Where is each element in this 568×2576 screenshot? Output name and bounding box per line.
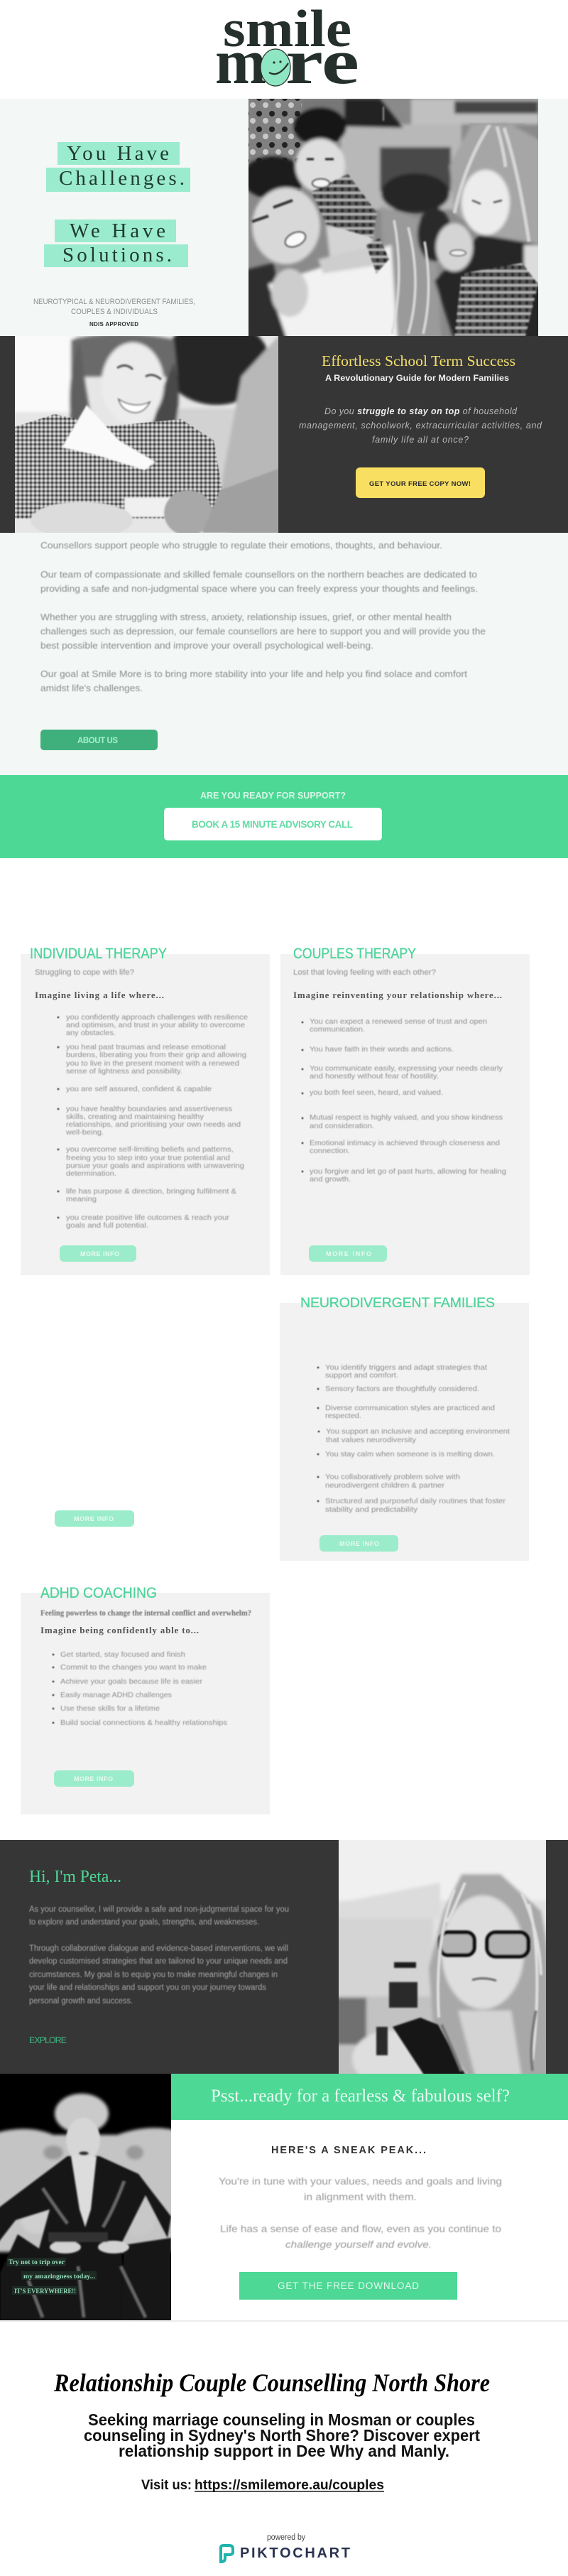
heading: NEURODIVERGENT FAMILIES	[300, 1295, 495, 1311]
bullet list: you have healthy boundaries and assertiveness	[66, 1105, 232, 1113]
bullet list: Achieve your goals because life is easier	[60, 1677, 203, 1686]
bullet list: Get started, stay focused and finish	[60, 1650, 185, 1659]
button: more info: MORE INFO	[74, 1775, 113, 1782]
description: Seeking marriage counseling in Mosman or couples	[88, 2410, 475, 2429]
button: more info, left of neurodivergent panel	[55, 1510, 134, 1527]
band question: ARE YOU READY FOR SUPPORT?	[200, 791, 346, 801]
hero headline: Challenges.	[59, 167, 185, 190]
bullet list: burdens, liberating you from their grip and allowing	[66, 1051, 246, 1059]
icon: piktochart mark	[221, 2545, 233, 2562]
bullet list: determination.	[66, 1169, 116, 1178]
bullet list: skills, creating and maintaining healthy	[66, 1113, 204, 1121]
bullet list	[58, 1013, 248, 1230]
photo caption: my amazingness today...	[23, 2273, 95, 2280]
about text: Our goal at Smile More is to bring more stability into your life and help you find solace and comfort	[40, 669, 468, 679]
button: more info	[309, 1245, 387, 1262]
photo: smiling schoolgirl	[15, 336, 278, 533]
bullet list	[302, 1017, 506, 1184]
bullet list	[317, 1363, 510, 1514]
photo: Peta portrait	[339, 1840, 546, 2074]
bullet list: Commit to the changes you want to make	[60, 1663, 207, 1672]
bullet list: You collaboratively problem solve with	[325, 1473, 460, 1481]
bullet list: respected.	[325, 1412, 361, 1420]
panel: about Peta	[0, 1836, 568, 2087]
button: more info: MORE INFO	[326, 1250, 371, 1257]
description: relationship support in Dee Why and Manly.	[119, 2442, 449, 2460]
heading: INDIVIDUAL THERAPY	[30, 946, 167, 962]
photo: laughing family	[242, 99, 543, 341]
guide question	[299, 406, 542, 445]
button: advisory call	[164, 808, 382, 840]
hero subtitle: COUPLES & INDIVIDUALS	[71, 308, 158, 316]
bullet list: Structured and purposeful daily routines that foster	[325, 1497, 506, 1505]
bio text: Through collaborative dialogue and evidence-based interventions, we will	[29, 1944, 288, 1953]
bullet list: that values neurodiversity	[326, 1436, 417, 1444]
bio text: personal growth and success.	[29, 1997, 133, 2006]
bullet list: You communicate easily, expressing your needs clearly	[310, 1064, 503, 1073]
bullet list: you heal past traumas and release emotional	[66, 1043, 226, 1051]
about text: best possible intervention and improve your overall psychological well-being.	[40, 641, 373, 651]
heading: ADHD COACHING	[40, 1585, 157, 1601]
guide subtitle: A Revolutionary Guide for Modern Families	[325, 373, 509, 383]
bullet list: freeing you to step into your true potential and	[66, 1154, 230, 1162]
bullet list: Use these skills for a lifetime	[60, 1704, 160, 1713]
hero subtitle: NDIS APPROVED	[89, 321, 138, 328]
piktochart footer: powered by	[267, 2533, 305, 2542]
about text: Whether you are struggling with stress, anxiety, relationship issues, grief, or other mental health	[40, 612, 452, 622]
button: advisory call: BOOK A 15 MINUTE ADVISORY CALL	[192, 819, 353, 830]
bullet list: Build social connections & healthy relationships	[60, 1719, 227, 1727]
bio text: circumstances. My goal is to equip you to make meaningful changes in	[29, 1971, 278, 1979]
bullet list: you both feel seen, heard, and valued.	[310, 1088, 443, 1097]
bullet list: sense of lightness and possibility.	[66, 1067, 182, 1076]
bullet list: stability and predictability	[325, 1505, 418, 1514]
hero headline: We Have	[70, 220, 165, 242]
bullet list: you confidently approach challenges with resilience	[66, 1013, 248, 1022]
button: free copy	[356, 467, 485, 498]
bullet list: You stay calm when someone is is melting down.	[325, 1450, 495, 1459]
bullet list: meaning	[66, 1195, 97, 1203]
panel: free download	[0, 2074, 568, 2320]
bullet list: Emotional intimacy is achieved through closeness and	[310, 1139, 500, 1147]
about text: providing a safe and non-judgmental space where you can freely express your thoughts and feelings.	[40, 584, 478, 594]
website link: https://smilemore.au/couples	[195, 2478, 384, 2493]
guide question: Do you struggle to stay on top of household	[324, 406, 518, 416]
button: more info: MORE INFO	[339, 1540, 379, 1547]
bio text: to explore and understand your goals, strengths, and weaknesses.	[29, 1918, 259, 1927]
bullet list: you create positive life outcomes & reach your	[66, 1213, 230, 1222]
hero subtitle	[33, 298, 195, 328]
explore link: EXPLORE	[29, 2035, 67, 2045]
guide question: management, schoolwork, extracurricular activities, and	[299, 421, 542, 431]
bio text: develop customised strategies that are tailored to your unique needs and	[29, 1957, 288, 1966]
bio text: As your counsellor, I will provide a safe and non-judgmental space for you	[29, 1905, 289, 1914]
intro question: Lost that loving feeling with each other?	[293, 968, 436, 977]
button: more info	[320, 1535, 398, 1552]
bullet list: well-being.	[65, 1128, 104, 1137]
bullet list: Mutual respect is highly valued, and you show kindness	[310, 1113, 503, 1122]
bullet list: support and comfort.	[325, 1371, 398, 1380]
panel: about	[0, 533, 568, 775]
panel: individual therapy	[21, 946, 270, 1275]
bullet list: communication.	[310, 1025, 365, 1034]
banner heading: Psst...ready for a fearless & fabulous self?	[211, 2087, 510, 2106]
intro question: Feeling powerless to change the internal conflict and overwhelm?	[40, 1609, 251, 1618]
sneak peak text: Life has a sense of ease and flow, even as you continue to	[220, 2223, 501, 2234]
bullet list: connection.	[310, 1147, 350, 1155]
page title: Relationship Couple Counselling North Shore	[53, 2369, 490, 2397]
bullet list: and honestly without fear of hostility.	[310, 1072, 439, 1081]
bullet list: neurodivergent children & partner	[325, 1481, 445, 1490]
panel: call to action band	[0, 775, 568, 858]
intro question: Struggling to cope with life?	[35, 968, 134, 977]
bio text	[29, 1905, 289, 2006]
about text: challenges such as depression, our female counsellors are here to support you and will provide you the	[40, 627, 486, 637]
header: logo: m	[215, 27, 266, 97]
sneak peak text: You're in tune with your values, needs and goals and living	[219, 2175, 502, 2187]
bullet list: and consideration.	[310, 1122, 374, 1130]
bullet list	[53, 1650, 227, 1727]
subheading: Imagine living a life where...	[35, 990, 164, 1000]
header: logo	[0, 0, 568, 99]
photo caption	[7, 2258, 97, 2295]
panel: couples therapy	[280, 946, 530, 1275]
button: about us	[40, 730, 158, 750]
bullet list: any obstacles.	[66, 1029, 116, 1037]
hero subtitle: NEUROTYPICAL & NEURODIVERGENT FAMILIES,	[33, 298, 195, 306]
bullet list: You can expect a renewed sense of trust and open	[310, 1017, 487, 1026]
guide title: Effortless School Term Success	[322, 352, 515, 369]
button: more info	[60, 1245, 136, 1262]
bullet list: You have faith in their words and actions.	[310, 1045, 454, 1054]
bio text: your life and relationships and support you on your journey towards	[29, 1984, 266, 1992]
hero headline: You Have	[67, 142, 169, 165]
website link: Visit us:	[141, 2478, 192, 2493]
bullet list: You support an inclusive and accepting environment	[326, 1427, 510, 1436]
bullet list: you overcome self-limiting beliefs and patterns,	[66, 1145, 234, 1154]
sneak peak text	[219, 2175, 502, 2250]
panel: adhd coaching	[21, 1585, 270, 1814]
subheading: Imagine reinventing your relationship where...	[293, 990, 502, 1000]
description	[84, 2410, 480, 2460]
panel: school term guide	[0, 336, 568, 533]
about text: amidst life's challenges.	[40, 683, 143, 693]
subheading: Imagine being confidently able to...	[40, 1625, 199, 1635]
panel: hero	[0, 99, 568, 341]
piktochart footer	[221, 2533, 350, 2562]
sneak peak text: in alignment with them.	[304, 2191, 417, 2202]
bullet list: and optimism, and trust in your ability to overcome	[66, 1021, 245, 1029]
button: more info: MORE INFO	[80, 1250, 119, 1257]
button: free download: GET THE FREE DOWNLOAD	[278, 2280, 419, 2291]
panel: neurodivergent families	[280, 1295, 529, 1561]
piktochart footer: PIKTOCHART	[240, 2545, 350, 2561]
guide question: family life all at once?	[372, 435, 469, 445]
bullet list: Sensory factors are thoughtfully considered.	[325, 1385, 479, 1393]
bullet list: and growth.	[310, 1175, 351, 1184]
sneak peak heading: HERE'S A SNEAK PEAK...	[271, 2145, 426, 2156]
about text: Our team of compassionate and skilled female counsellors on the northern beaches are dedicated to	[40, 570, 477, 580]
bullet list: Diverse communication styles are practiced and	[325, 1404, 495, 1412]
bullet list: Easily manage ADHD challenges	[60, 1691, 172, 1699]
button: free copy: GET YOUR FREE COPY NOW!	[369, 480, 471, 488]
photo caption: Try not to trip over	[9, 2259, 65, 2266]
photo caption: IT'S EVERYWHERE!!	[14, 2288, 76, 2295]
about text: Counsellors support people who struggle to regulate their emotions, thoughts, and behaviour.	[40, 541, 442, 551]
heading: COUPLES THERAPY	[293, 946, 416, 962]
about text	[40, 541, 486, 693]
button: more info, left of neurodivergent panel: MORE INFO	[74, 1515, 114, 1522]
bullet list: you are self assured, confident & capable	[66, 1085, 212, 1093]
bullet list: You identify triggers and adapt strategies that	[325, 1363, 487, 1372]
button: more info	[54, 1770, 134, 1787]
hero headline: Solutions.	[62, 244, 172, 266]
photo: glamorous woman on sofa	[0, 2074, 175, 2320]
bullet list: life has purpose & direction, bringing fulfilment &	[66, 1187, 236, 1196]
description: counseling in Sydney's North Shore? Discover expert	[84, 2426, 480, 2445]
button: about us: ABOUT US	[77, 737, 118, 745]
hero headline	[44, 142, 190, 267]
bullet list: relationships, and prioritising your own needs and	[66, 1120, 241, 1129]
button: free download	[239, 2272, 457, 2300]
bullet list: goals and full potential.	[66, 1221, 148, 1230]
bullet list: pursue your goals and aspirations with unwavering	[66, 1162, 244, 1170]
header: logo: re	[285, 27, 359, 97]
bullet list: you forgive and let go of past hurts, allowing for healing	[310, 1167, 506, 1176]
heading: Hi, I'm Peta...	[29, 1868, 121, 1886]
sneak peak text: challenge yourself and evolve.	[285, 2239, 432, 2250]
bullet list: you to live in the present moment with a renewed	[66, 1059, 239, 1068]
banner heading	[171, 2074, 568, 2120]
header: logo: smile	[223, 0, 351, 58]
